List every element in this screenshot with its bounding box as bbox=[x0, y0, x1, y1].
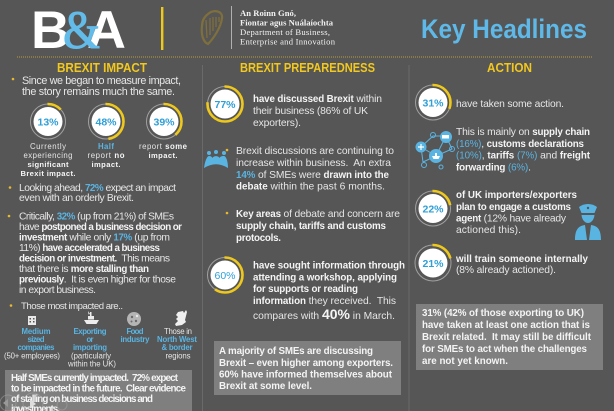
text: discussions continuing: 14% of SMEs were drawn into the bbox=[236, 170, 390, 181]
gauge: 60%: 60% bbox=[214, 270, 236, 282]
icon: customs officer bbox=[575, 204, 601, 240]
column: north west and border: Those in bbox=[164, 327, 192, 336]
column: medium sized companies: sized bbox=[28, 335, 45, 344]
caption: 48%: report no bbox=[88, 151, 125, 160]
critical bullet: 11%) have accelerated a business bbox=[19, 243, 161, 254]
column: north west and border: North West bbox=[157, 335, 197, 344]
callout: action summary: 31% (42% of those exporting to UK) bbox=[422, 308, 584, 319]
gauge: 22%: 22% bbox=[422, 204, 444, 216]
callout: preparedness summary: 60% have informed themselves about bbox=[219, 370, 393, 380]
column: exporting or importing: Exporting bbox=[74, 327, 107, 336]
callout: preparedness summary: A majority of SMEs are discussing bbox=[219, 346, 373, 357]
heading: Brexit preparedness: BREXIT PREPAREDNESS bbox=[240, 60, 375, 75]
logo: B&A bbox=[31, 0, 126, 60]
critical bullet: Critically, 32% (up from 21%) of SMEs bbox=[19, 212, 174, 222]
heading: action: ACTION bbox=[487, 60, 532, 75]
gauge: 77% bbox=[208, 86, 242, 122]
text: sought information: have sought information through bbox=[253, 260, 405, 272]
text: mainly on supply chain: (16%), customs declarations bbox=[456, 139, 585, 150]
critical bullet: have postponed a business decision or bbox=[19, 222, 182, 233]
logo: B&A: A bbox=[87, 1, 126, 60]
text: sought information: information they received. This bbox=[253, 296, 396, 307]
column: food industry bbox=[120, 327, 150, 344]
caption: 39%: impact. bbox=[148, 151, 178, 160]
department name bbox=[240, 8, 336, 46]
heading: Brexit impact: BREXIT IMPACT bbox=[57, 60, 147, 75]
text: discussions continuing: increase within business. An extra bbox=[236, 158, 391, 169]
critical bullet: decision or investment. This means bbox=[19, 254, 170, 264]
most impacted bullet: Those most impacted are.. bbox=[21, 301, 123, 312]
gauge: 31% bbox=[416, 85, 450, 120]
critical bullet: that there is more stalling than bbox=[19, 264, 149, 275]
column: medium sized companies bbox=[4, 327, 60, 360]
text: customs agent: actioned this). bbox=[456, 225, 521, 236]
text: mainly on supply chain: (10%), tariffs (7%) and freight bbox=[456, 150, 591, 162]
intro bullet bbox=[12, 75, 181, 98]
column: medium sized companies: (50+ employees) bbox=[4, 352, 60, 360]
callout: impact summary: to be impacted in the future. Clear evidence bbox=[11, 384, 187, 394]
column: exporting or importing: within the UK) bbox=[67, 360, 116, 368]
icon: pizza bbox=[127, 312, 141, 326]
text: train someone: will train someone internally bbox=[455, 254, 589, 265]
text: discussed Brexit: have discussed Brexit within bbox=[253, 94, 382, 105]
looking ahead bullet: Looking ahead, 72% expect an impact bbox=[19, 183, 176, 194]
logo: B&A: & bbox=[63, 0, 100, 60]
icon: building bbox=[28, 316, 36, 325]
key areas bullet: Key areas of debate and concern are bbox=[236, 209, 400, 220]
key areas bullet bbox=[226, 209, 400, 244]
caption: 39% bbox=[139, 142, 188, 160]
callout: preparedness summary: Brexit – even higher among exporters. bbox=[219, 358, 393, 369]
caption: 13%: significant bbox=[28, 160, 69, 169]
caption: 13%: Brexit impact. bbox=[20, 169, 76, 178]
text: mainly on supply chain: forwarding (6%). bbox=[456, 162, 531, 174]
gauge: 39%: 39% bbox=[153, 116, 175, 128]
column: food industry: industry bbox=[120, 335, 150, 344]
icon: harp emblem bbox=[202, 11, 222, 44]
gauge: 13%: 13% bbox=[37, 116, 59, 128]
column: exporting or importing bbox=[67, 327, 116, 368]
text: customs agent: agent (12% have already bbox=[456, 214, 567, 224]
gauge: 48%: 48% bbox=[95, 116, 117, 128]
divider: department separator bbox=[231, 6, 232, 49]
callout: impact summary: of stalling on business decisions and bbox=[11, 394, 153, 405]
callout: action summary: Brexit related. It may still be difficult bbox=[422, 332, 592, 343]
icon: supply chain network bbox=[416, 131, 454, 169]
callout: impact summary: Half SMEs currently impacted. 72% expect bbox=[11, 373, 179, 384]
intro bullet: Since we began to measure impact, bbox=[22, 75, 181, 87]
icon: ship bbox=[84, 311, 99, 324]
critical bullet: in export business. bbox=[19, 285, 96, 296]
text: sought information: for supports or reading bbox=[253, 284, 358, 295]
column: medium sized companies: Medium bbox=[22, 327, 51, 336]
logo: B&A: B bbox=[31, 1, 70, 60]
caption: 48% bbox=[88, 142, 125, 169]
text: sought information: attending a workshop, applying bbox=[253, 272, 397, 284]
text: customs agent: plan to engage a customs bbox=[456, 202, 572, 213]
department name: Enterprise and Innovation bbox=[240, 36, 336, 46]
column: exporting or importing: importing bbox=[73, 343, 107, 352]
text: customs agent: of UK importers/exporters bbox=[456, 190, 578, 201]
text: discussions continuing: debate within the past 6 months. bbox=[236, 182, 385, 192]
gauge: 21%: 21% bbox=[422, 258, 444, 270]
panel: action bbox=[415, 60, 603, 370]
text: discussions continuing: Brexit discussions are continuing to bbox=[236, 146, 394, 157]
text: sought information: compares with 40% in March. bbox=[253, 306, 395, 322]
text: customs agent bbox=[456, 190, 578, 236]
department name: Department of Business, bbox=[240, 27, 330, 37]
column: north west and border: & border bbox=[162, 343, 192, 352]
callout: action summary: are not yet known. bbox=[422, 356, 508, 367]
column: food industry: Food bbox=[126, 327, 144, 336]
column: exporting or importing: (particularly bbox=[71, 352, 111, 360]
department name: Fiontar agus Nuálaíochta bbox=[240, 18, 334, 28]
callout: action summary bbox=[416, 304, 603, 370]
critical bullet: previously. It is even higher for those bbox=[19, 274, 176, 286]
text: discussed Brexit bbox=[253, 94, 382, 129]
text: train someone: (8% already actioned). bbox=[456, 265, 556, 276]
text: taken action: have taken some action. bbox=[456, 99, 564, 110]
caption: 13%: Currently bbox=[30, 142, 66, 151]
caption: 48%: impact. bbox=[92, 160, 120, 169]
caption: 48%: Half bbox=[98, 142, 114, 151]
icon: meeting group bbox=[204, 149, 228, 168]
gauge: 48% bbox=[88, 104, 124, 139]
gauge: 60% bbox=[208, 258, 242, 292]
gauge: 39% bbox=[146, 104, 182, 139]
icon: map of Ireland bbox=[175, 310, 187, 326]
department name: An Roinn Gnó, bbox=[240, 8, 296, 18]
callout: impact summary bbox=[5, 370, 192, 411]
gauge: 77%: 77% bbox=[214, 99, 236, 111]
caption: 13%: experiencing bbox=[24, 151, 72, 160]
gauge: 21% bbox=[415, 245, 451, 281]
text: sought information bbox=[253, 260, 405, 322]
column: medium sized companies: companies bbox=[18, 343, 55, 352]
gauge: 13% bbox=[30, 104, 66, 139]
text: discussions continuing bbox=[236, 146, 394, 192]
text: mainly on supply chain: This is mainly on supply chain bbox=[456, 127, 590, 138]
intro bullet: the story remains much the same. bbox=[22, 86, 175, 98]
gauge: 31%: 31% bbox=[422, 98, 444, 110]
column: north west and border bbox=[157, 327, 197, 360]
callout: preparedness summary: Brexit at some level. bbox=[219, 381, 312, 392]
callout: action summary: for SMEs to act when the challenges bbox=[422, 344, 588, 355]
critical bullet: investment while only 17% (up from bbox=[19, 232, 170, 244]
caption: 13% bbox=[20, 142, 76, 178]
looking ahead bullet bbox=[9, 183, 176, 204]
looking ahead bullet: even with an orderly Brexit. bbox=[19, 193, 134, 204]
title: Key Headlines: Key Headlines bbox=[421, 14, 587, 44]
column: north west and border: regions bbox=[166, 352, 191, 360]
key areas bullet: protocols. bbox=[236, 233, 281, 244]
gauge: 22% bbox=[416, 191, 450, 226]
critical bullet bbox=[8, 212, 182, 296]
column: exporting or importing: or bbox=[86, 335, 94, 344]
panel: Brexit impact bbox=[0, 60, 197, 411]
text: mainly on supply chain bbox=[456, 127, 591, 174]
key areas bullet: supply chain, tariffs and customs bbox=[236, 221, 387, 232]
callout: action summary: have taken at least one action that is bbox=[422, 320, 591, 331]
text: discussed Brexit: exporters). bbox=[253, 118, 301, 129]
divider: logo separator bbox=[161, 7, 163, 50]
video controls overlay bbox=[0, 393, 67, 411]
callout: preparedness summary bbox=[214, 341, 401, 395]
caption: 39%: report some bbox=[139, 142, 188, 151]
text: train someone bbox=[455, 254, 589, 276]
panel: Brexit preparedness bbox=[204, 60, 405, 395]
text: discussed Brexit: their business (86% of UK bbox=[253, 106, 368, 117]
